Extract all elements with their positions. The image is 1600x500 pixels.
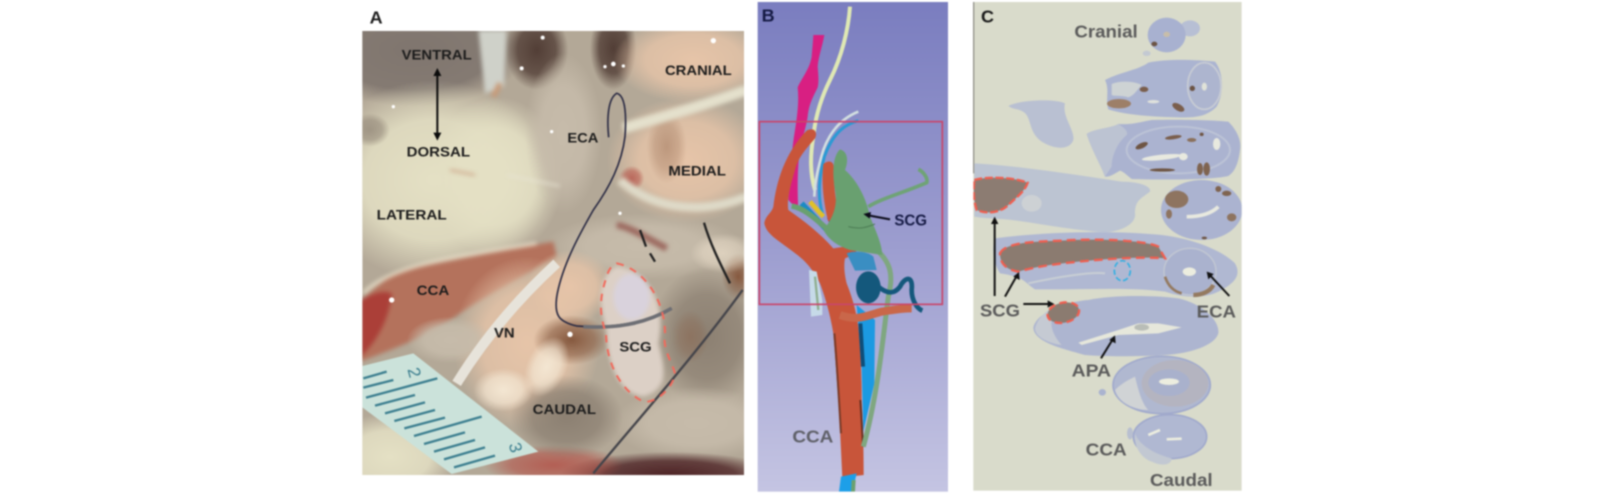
APA label: APA	[1072, 361, 1111, 381]
slide background	[973, 2, 1242, 491]
arrows	[991, 217, 1229, 358]
labels in photo: ECA	[567, 129, 598, 145]
pale vessel strip	[809, 270, 822, 317]
ECA label: ECA	[1197, 302, 1236, 322]
labels in photo: DORSAL	[407, 144, 470, 160]
ruler: 3	[505, 440, 527, 455]
common carotid artery	[360, 242, 557, 362]
red region box	[759, 122, 942, 304]
green ganglion	[823, 149, 882, 255]
labels in photo: VN	[494, 324, 515, 340]
surgical field photo	[361, 30, 745, 476]
SCG label with arrow	[863, 212, 927, 230]
SCG label with arrow: SCG	[894, 213, 927, 230]
labels in photo: CRANIAL	[665, 62, 732, 78]
section 9	[1099, 356, 1210, 414]
labels in photo: CCA	[417, 282, 449, 298]
pale nerve	[811, 7, 850, 190]
SCG label: SCG	[980, 301, 1020, 321]
green nerve trunk	[863, 250, 891, 447]
panel letter B: B	[762, 6, 775, 26]
section 2	[1105, 60, 1222, 118]
CCA label: CCA	[792, 427, 833, 447]
dashed outline of SCG	[601, 263, 675, 402]
labels in photo: LATERAL	[377, 206, 447, 222]
section 7 with long SCG and ECA	[993, 232, 1238, 297]
superior cervical ganglion tissue	[601, 267, 663, 397]
deep tissue and vagus nerve	[407, 250, 623, 458]
CCA label: CCA	[1086, 439, 1127, 459]
ruler	[362, 353, 538, 474]
panel A: surgical photograph	[361, 10, 745, 476]
section 8 with SCG and APA	[1033, 296, 1218, 356]
Caudal label: Caudal	[1150, 470, 1213, 490]
3D model structures	[759, 7, 942, 492]
section 4	[1008, 100, 1073, 148]
section 10	[1127, 415, 1207, 465]
section 6	[1161, 180, 1242, 240]
distal blue tip	[839, 473, 857, 492]
3D model background	[758, 2, 948, 492]
Cranial label: Cranial	[1074, 21, 1138, 41]
orange artery	[764, 129, 864, 477]
labels in photo: CAUDAL	[533, 401, 596, 417]
external carotid branch	[840, 308, 912, 318]
orange internal carotid	[823, 161, 839, 222]
magenta vessel	[788, 35, 824, 211]
panel letter A: A	[370, 7, 383, 27]
dark blue structure	[847, 252, 877, 271]
panel B: 3D reconstruction	[758, 2, 948, 492]
section 1	[1143, 18, 1200, 56]
section 3	[1087, 120, 1240, 180]
labels in photo	[377, 46, 732, 417]
slide left edge	[972, 2, 975, 173]
section 5 with SCG	[974, 163, 1150, 232]
blue nerve branches	[802, 112, 858, 235]
tissue sections	[974, 18, 1242, 465]
orientation arrow ventral-dorsal	[433, 68, 441, 141]
soft tissue colour regions	[300, 0, 780, 500]
specular highlights	[389, 36, 716, 337]
panel C: histology sections	[973, 2, 1242, 491]
labels in photo: VENTRAL	[402, 46, 472, 62]
panel letter C: C	[981, 6, 994, 26]
ruler: 2	[403, 365, 425, 380]
figure with three panels	[361, 1, 1242, 493]
suture thread	[556, 93, 743, 473]
blue nerve trunk	[857, 305, 875, 432]
labels in photo: SCG	[619, 339, 652, 355]
labels in photo: MEDIAL	[668, 163, 726, 179]
